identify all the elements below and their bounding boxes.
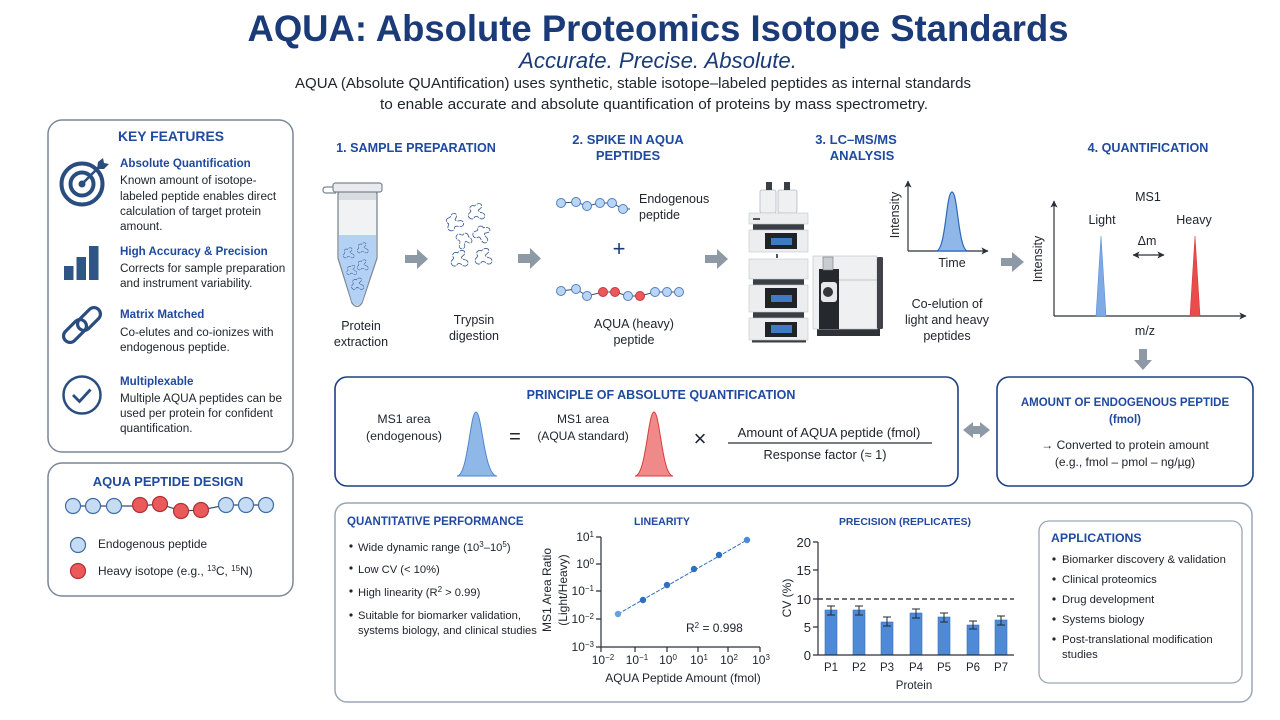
chart: MS1 spectrum [1031, 190, 1246, 338]
chart: chromatogram [888, 181, 988, 270]
feature: high accuracy: and instrument variability. [120, 277, 252, 290]
y tick labels: 1 [590, 530, 595, 539]
feature: multiplexable: quantification. [120, 422, 193, 435]
bullet list: performance: 2 [438, 585, 443, 594]
feature: absolute quantification: labeled peptide enables direct [120, 190, 277, 203]
feature: high accuracy: Corrects for sample preparation [120, 262, 285, 275]
error bars [827, 606, 1005, 629]
chart: MS1 spectrum: m/z [1135, 324, 1155, 338]
panel: applications [1039, 521, 1242, 683]
legend: heavy isotope: 15 [231, 564, 241, 573]
threshold line [818, 598, 1014, 600]
y tick labels [572, 530, 595, 654]
panel: AQUA peptide design [48, 463, 293, 596]
chart: MS1 spectrum: Δm [1138, 234, 1156, 248]
fraction: Response factor (≈ 1) [764, 447, 886, 462]
feature: matrix matched: Co-elutes and co-ionizes with [120, 326, 273, 339]
label: AQUA heavy peptide: peptide [613, 333, 655, 347]
y tick labels: 0 [804, 648, 811, 663]
x tick labels: 0 [672, 653, 677, 662]
bullet list: performance: 5 [502, 540, 507, 549]
x tick labels: P6 [966, 662, 980, 674]
chart: linearity [540, 516, 770, 685]
step heading 1: 1. SAMPLE PREPARATION [336, 141, 496, 155]
heading: applications: APPLICATIONS [1051, 531, 1142, 545]
fraction: Amount of AQUA peptide (fmol) [738, 425, 920, 440]
x tick labels: 10 [752, 653, 765, 667]
R squared: = 0.998 [699, 621, 743, 635]
arrow [518, 248, 541, 269]
x tick labels: 10 [659, 653, 672, 667]
axes [596, 537, 760, 652]
y axis title: (Light/Heavy) [556, 554, 570, 626]
chart: precision [780, 517, 1014, 692]
icon: sample tube [323, 183, 382, 306]
text: conversion: (e.g., fmol – pmol – ng/µg) [1055, 455, 1195, 469]
feature: multiplexable [120, 375, 282, 435]
label: protein extraction: extraction [334, 335, 388, 349]
bullet list: performance: 3 [479, 540, 484, 549]
x axis title: Protein [896, 680, 932, 692]
x tick labels: 10 [720, 653, 733, 667]
panel: key features [48, 120, 293, 452]
feature: absolute quantification: Known amount of isotope- [120, 174, 257, 187]
bullet list: applications: Biomarker discovery & validation [1062, 554, 1226, 566]
y tick labels: −3 [585, 640, 595, 649]
legend: heavy isotope: N) [240, 564, 253, 578]
peak: endogenous [457, 412, 497, 476]
axes [813, 542, 1014, 655]
x tick labels: P3 [880, 662, 894, 674]
x tick labels: P5 [937, 662, 951, 674]
x axis title: AQUA Peptide Amount (fmol) [605, 671, 761, 685]
feature: absolute quantification [120, 157, 277, 233]
label: endogenous peptide: Endogenous [639, 192, 709, 206]
equals sign: = [509, 426, 521, 448]
legend: heavy isotope [70, 564, 253, 578]
label: MS1 area AQUA standard [537, 412, 629, 443]
bullet list: applications: Drug development [1062, 594, 1155, 606]
label: AQUA heavy peptide: AQUA (heavy) [594, 317, 674, 331]
multiply sign: × [694, 426, 706, 451]
fraction [728, 425, 932, 462]
plus sign: + [613, 236, 625, 261]
y tick labels: 20 [797, 535, 811, 550]
description: AQUA (Absolute QUAntification) uses synthetic, stable isotope–labeled peptides as internal standards [295, 75, 971, 92]
feature: matrix matched [120, 308, 273, 354]
icon: chain link [61, 305, 103, 345]
heading: amount: (fmol) [1109, 414, 1141, 426]
y tick labels [797, 535, 811, 663]
bars [825, 610, 1007, 655]
y axis title: CV (%) [780, 579, 794, 617]
bullet list: performance: Wide dynamic range (10 [358, 542, 479, 554]
x tick labels: 10 [592, 653, 605, 667]
x tick labels: −1 [639, 653, 649, 662]
R squared: 2 [695, 621, 700, 630]
heading: amount [1021, 397, 1229, 426]
label: MS1 area endogenous: (endogenous) [366, 429, 442, 443]
feature: high accuracy [120, 245, 285, 290]
label: co-elution: light and heavy [905, 313, 990, 327]
x tick labels [824, 662, 1008, 674]
x tick labels: P7 [994, 662, 1008, 674]
feature: absolute quantification: amount. [120, 220, 162, 233]
diagram: endogenous peptide chain [556, 198, 630, 214]
label: protein extraction [334, 319, 388, 349]
label: endogenous peptide [639, 192, 709, 222]
label: protein extraction: Protein [341, 319, 381, 333]
step heading 3: ANALYSIS [830, 148, 895, 163]
legend: heavy isotope: Heavy isotope (e.g., [98, 564, 204, 578]
step heading 3: 3. LC–MS/MS [815, 132, 897, 147]
x tick labels: 3 [765, 653, 770, 662]
panel: quantitative performance and charts [335, 503, 1252, 702]
label: co-elution: Co-elution of [912, 297, 983, 311]
label: MS1 area endogenous [366, 412, 442, 443]
heading: quantitative performance: QUANTITATIVE PERFORMANCE [347, 516, 524, 528]
text: conversion: → Converted to protein amount [1041, 438, 1209, 452]
legend: heavy isotope: C, [216, 564, 231, 578]
icon: target [62, 158, 109, 204]
y tick labels: 10 [572, 640, 585, 654]
description: to enable accurate and absolute quantification of proteins by mass spectrometry. [380, 96, 928, 113]
feature: multiplexable: Multiple AQUA peptides can be [120, 392, 282, 405]
y tick labels: 10 [576, 557, 590, 571]
x tick labels: 2 [733, 653, 738, 662]
text: conversion [1041, 438, 1209, 469]
panel: principle of absolute quantification [335, 377, 958, 486]
x tick labels: P4 [909, 662, 924, 674]
label: MS1 area AQUA standard: MS1 area [557, 412, 609, 426]
chart: MS1 spectrum: Intensity [1031, 235, 1045, 282]
trend line and points [615, 537, 750, 617]
x tick labels: 10 [626, 653, 639, 667]
label: co-elution: peptides [923, 329, 971, 343]
x tick labels: 1 [703, 653, 708, 662]
y tick labels: 0 [590, 557, 595, 566]
chart: MS1 spectrum: Light [1088, 213, 1116, 227]
description [295, 75, 971, 113]
y tick labels: 15 [797, 563, 811, 578]
legend: endogenous peptide: Endogenous peptide [98, 537, 207, 551]
feature: matrix matched: endogenous peptide. [120, 341, 230, 354]
icon: bars [64, 246, 98, 280]
heading: amount: AMOUNT OF ENDOGENOUS PEPTIDE [1021, 397, 1229, 409]
y axis title [540, 548, 570, 632]
y tick labels: 10 [572, 612, 585, 626]
label: trypsin digestion: Trypsin [454, 313, 494, 327]
y axis title: MS1 Area Ratio [540, 548, 554, 632]
bullet list: performance: –10 [484, 542, 502, 554]
heading: peptide design: AQUA PEPTIDE DESIGN [93, 474, 243, 489]
label: MS1 area AQUA standard: (AQUA standard) [537, 429, 629, 443]
step heading 2 [572, 132, 684, 163]
arrow [705, 249, 728, 269]
y tick labels: 10 [576, 530, 590, 544]
feature: matrix matched: Matrix Matched [120, 308, 204, 321]
arrow: down [1134, 349, 1152, 370]
bullet list: applications: studies [1062, 649, 1098, 661]
step heading 2: PEPTIDES [596, 148, 660, 163]
panel: amount of endogenous peptide [997, 377, 1253, 486]
label: MS1 area endogenous: MS1 area [377, 412, 431, 426]
arrow [1001, 252, 1024, 272]
x tick labels: 10 [690, 653, 703, 667]
x tick labels: P1 [824, 662, 838, 674]
icon: check circle [64, 376, 100, 414]
icon: LC-MS instrument [749, 182, 883, 342]
R squared: R [686, 621, 695, 635]
heading: linearity: LINEARITY [634, 516, 690, 528]
chart: MS1 spectrum: MS1 [1135, 190, 1161, 204]
bullet list: applications: Systems biology [1062, 614, 1145, 626]
y tick labels: 10 [797, 592, 811, 607]
bullet list: performance: systems biology, and clinical studies [358, 625, 537, 637]
bullet list: performance: > 0.99) [442, 587, 481, 599]
icon: digested peptides [443, 204, 493, 266]
x tick labels: P2 [852, 662, 866, 674]
bullet list: applications [1052, 554, 1226, 661]
feature: absolute quantification: calculation of target protein [120, 205, 261, 218]
y tick labels: 5 [804, 620, 811, 635]
feature: high accuracy: High Accuracy & Precision [120, 245, 268, 258]
step heading 3 [815, 132, 897, 163]
bullet list: performance: Low CV (< 10%) [358, 564, 440, 576]
title: AQUA: Absolute Proteomics Isotope Standards [248, 8, 1068, 49]
subtitle: Accurate. Precise. Absolute. [517, 48, 797, 73]
chart: chromatogram: Intensity [888, 191, 902, 238]
bullet list: performance: High linearity (R [358, 587, 438, 599]
heading: principle: PRINCIPLE OF ABSOLUTE QUANTIFICATION [527, 388, 795, 402]
y tick labels: −1 [585, 584, 595, 593]
bullet list: applications: Post-translational modification [1062, 634, 1213, 646]
diagram: peptide chain [66, 496, 274, 518]
chart: MS1 spectrum: Heavy [1176, 213, 1212, 227]
y tick labels: 10 [572, 584, 585, 598]
chart: chromatogram: Time [938, 256, 966, 270]
peak: AQUA standard [635, 412, 673, 476]
diagram: AQUA heavy peptide chain [556, 284, 684, 300]
step heading 2: 2. SPIKE IN AQUA [572, 132, 684, 147]
y tick labels: −2 [585, 612, 595, 621]
label: trypsin digestion [449, 313, 499, 343]
heading: key features: KEY FEATURES [118, 128, 224, 144]
label: trypsin digestion: digestion [449, 329, 499, 343]
feature: multiplexable: used per protein for confident [120, 407, 274, 420]
x tick labels [592, 653, 770, 667]
legend: heavy isotope: 13 [207, 564, 217, 573]
x tick labels: −2 [605, 653, 615, 662]
bullet list: performance: ) [507, 542, 511, 554]
bullet list: applications: Clinical proteomics [1062, 574, 1157, 586]
label: endogenous peptide: peptide [639, 208, 680, 222]
feature: multiplexable: Multiplexable [120, 375, 194, 388]
label: co-elution [905, 297, 990, 343]
step heading 4: 4. QUANTIFICATION [1088, 141, 1208, 155]
feature: absolute quantification: Absolute Quantification [120, 157, 251, 170]
bullet list: performance [349, 540, 537, 637]
label: AQUA heavy peptide [594, 317, 674, 347]
bullet list: performance: Suitable for biomarker validation, [358, 610, 521, 622]
arrow [405, 249, 428, 269]
heading: precision: PRECISION (REPLICATES) [839, 517, 971, 528]
arrow: double [963, 422, 990, 438]
